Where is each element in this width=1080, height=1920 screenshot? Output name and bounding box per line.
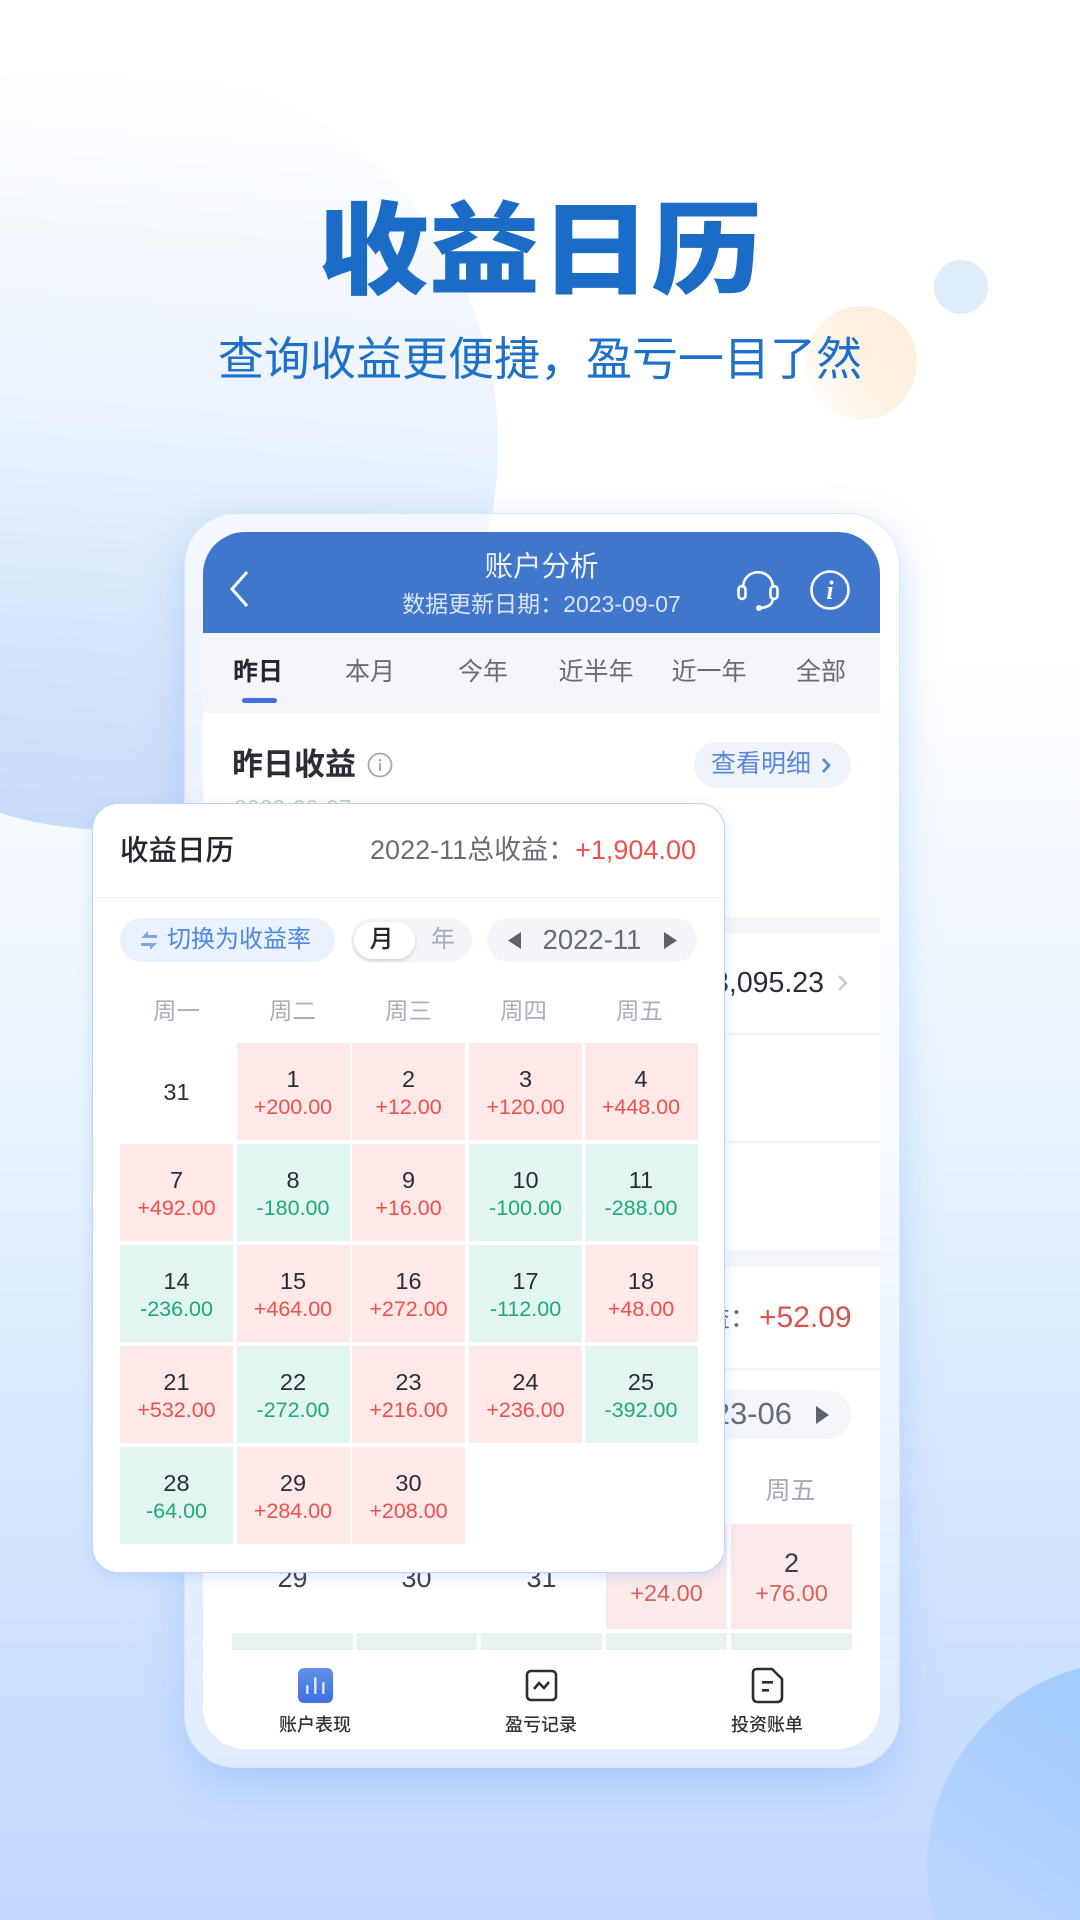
day 25: -392.00 [605, 1398, 677, 1422]
weekday: Wednesday: 周三 [385, 998, 432, 1024]
weekday: Thursday: 周四 [500, 998, 547, 1024]
day 14 [120, 1245, 233, 1342]
month selector [487, 918, 697, 962]
tab: all: 全部 [796, 658, 846, 686]
day 9: 9 [402, 1167, 415, 1193]
icon: next [664, 932, 677, 949]
title: 收益日历 [318, 195, 762, 308]
subtitle: 查询收益更便捷，盈亏一目了然 [218, 333, 862, 385]
app header bar [203, 532, 880, 633]
tab: half year: 近半年 [558, 658, 634, 686]
day 4 [584, 1043, 698, 1140]
toggle year: 年 [431, 926, 455, 953]
day 8 [236, 1144, 350, 1241]
header update date: 数据更新日期：2023-09-07 [402, 591, 681, 617]
month text: 2022-11 [543, 924, 641, 955]
day 23: +216.00 [369, 1398, 448, 1422]
calendar grid [120, 1043, 698, 1544]
day 2 [352, 1043, 465, 1140]
day 1 [236, 1043, 350, 1140]
background circle: large top-left [0, 191, 498, 830]
day 15: 15 [280, 1268, 306, 1294]
day 21: +532.00 [137, 1398, 216, 1422]
button label: 切换为收益率 [167, 926, 311, 953]
label: investment bill: 投资账单 [731, 1715, 803, 1735]
header title: 账户分析 [484, 551, 598, 583]
day 3 [469, 1043, 582, 1140]
panel: earnings calendar card [92, 803, 725, 1573]
period tabs [203, 633, 880, 713]
day 7: 7 [170, 1167, 183, 1193]
icon: small info [368, 752, 392, 778]
day 3: 3 [519, 1066, 532, 1092]
day 18: 18 [628, 1268, 654, 1294]
icon: swap arrows [141, 931, 157, 950]
tab: this month: 本月 [345, 658, 395, 686]
day 11: -288.00 [605, 1196, 677, 1220]
icon: info: i [826, 576, 834, 605]
row chevron [838, 975, 848, 991]
day 14: 14 [163, 1268, 190, 1294]
day 10: -100.00 [489, 1196, 562, 1220]
day 24: 24 [512, 1369, 539, 1395]
day 23 [352, 1346, 465, 1443]
monthly total value: +52.09 [759, 1301, 852, 1334]
day 9: +16.00 [375, 1196, 442, 1220]
day 29 [236, 1447, 350, 1544]
yesterday earnings heading: 昨日收益 [232, 747, 356, 782]
back calendar date 30: 30 [401, 1563, 432, 1593]
day 1: 1 [286, 1066, 300, 1092]
icon: back arrow [230, 571, 248, 607]
decorative circle: small blue [934, 260, 988, 314]
day 22: -272.00 [257, 1398, 329, 1422]
view details button [694, 742, 851, 788]
icon: next triangle [816, 1406, 829, 1424]
weekday label Friday: 周五 [765, 1477, 816, 1505]
day 30: +208.00 [369, 1499, 448, 1523]
day 15 [236, 1245, 350, 1342]
date selector behind card [500, 1390, 851, 1439]
tab: one year: 近一年 [671, 658, 746, 686]
weekday: Tuesday: 周二 [269, 998, 316, 1024]
icon: account performance [298, 1668, 333, 1703]
day 22 [236, 1346, 350, 1443]
decorative circle: bottom right [927, 1668, 1080, 1920]
day 23: 23 [395, 1369, 422, 1395]
back calendar cell 2: 2 [784, 1548, 799, 1578]
tab: yesterday active: 昨日 [233, 658, 283, 686]
label: profit record: 盈亏记录 [505, 1715, 577, 1735]
day 24: +236.00 [486, 1398, 565, 1422]
day 9 [352, 1144, 465, 1241]
panel: phone screen [203, 532, 880, 1749]
back calendar cell 1: +24.00 [630, 1580, 703, 1606]
card heading: 收益日历 [120, 835, 234, 867]
day 22: 22 [280, 1369, 306, 1395]
day 17 [469, 1245, 582, 1342]
day 25 [584, 1346, 698, 1443]
day 16: 16 [395, 1268, 422, 1294]
day 16 [352, 1245, 465, 1342]
date selector text: 2023-06 [678, 1396, 792, 1431]
day 28: -64.00 [146, 1499, 207, 1523]
section divider band [203, 917, 880, 933]
weekday: Friday: 周五 [616, 998, 663, 1024]
day 18 [584, 1245, 698, 1342]
switch to rate button [120, 918, 335, 962]
day 7: +492.00 [137, 1196, 216, 1220]
day 1: +200.00 [254, 1095, 332, 1119]
day 11: 11 [629, 1167, 653, 1193]
decorative circle: orange [805, 306, 917, 420]
day 16: +272.00 [369, 1297, 448, 1321]
day 2: +12.00 [375, 1095, 442, 1119]
back calendar date 29: 29 [277, 1563, 308, 1593]
phone frame [184, 513, 900, 1768]
day 21: 21 [163, 1369, 190, 1395]
day 10: 10 [512, 1167, 539, 1193]
active tab underline [242, 698, 277, 703]
back calendar cell 1 [606, 1524, 727, 1629]
view details button: 查看明细 [711, 750, 811, 778]
day 4: 4 [634, 1066, 648, 1092]
day 24 [469, 1346, 582, 1443]
icon: headset [737, 571, 779, 611]
back calendar next row strip [232, 1633, 852, 1650]
back calendar cell 2: +76.00 [755, 1580, 828, 1606]
monthly total label tail: 益： [704, 1303, 756, 1333]
card total earnings: 2022-11总收益：+1,904.00 [370, 835, 696, 865]
back calendar date 31: 31 [526, 1563, 557, 1593]
day 4: +448.00 [602, 1095, 680, 1119]
day 8: 8 [286, 1167, 300, 1193]
day 18: +48.00 [608, 1297, 674, 1321]
day 8: -180.00 [257, 1196, 329, 1220]
weekday: Monday: 周一 [153, 998, 200, 1024]
day 7 [120, 1144, 233, 1241]
toggle active month: 月 [370, 926, 394, 953]
day 11 [584, 1144, 698, 1241]
day 28: 28 [163, 1470, 190, 1496]
day 21 [120, 1346, 233, 1443]
day 3: +120.00 [486, 1095, 565, 1119]
day 31: 31 [163, 1079, 190, 1105]
month year toggle [351, 918, 472, 962]
icon: investment bill [752, 1668, 784, 1704]
icon: profit record [526, 1670, 558, 1702]
day 10 [469, 1144, 582, 1241]
total value: 133,095.23 [681, 967, 824, 999]
bottom navigation [203, 1650, 880, 1749]
clipped date text: 2023-09-07 [234, 795, 352, 821]
day 29: +284.00 [254, 1499, 332, 1523]
day 30 [352, 1447, 465, 1544]
day 28 [120, 1447, 233, 1544]
label: account performance: 账户表现 [279, 1715, 351, 1735]
day 14: -236.00 [140, 1297, 213, 1321]
day 25: 25 [628, 1369, 654, 1395]
tab: this year: 今年 [458, 658, 508, 686]
day 17: 17 [512, 1268, 539, 1294]
day 29: 29 [280, 1470, 306, 1496]
toggle active month [354, 922, 415, 959]
icon: info [810, 570, 850, 610]
day 15: +464.00 [254, 1297, 332, 1321]
day 2: 2 [402, 1066, 415, 1092]
day 17: -112.00 [490, 1297, 561, 1321]
back calendar cell 2 [731, 1524, 852, 1629]
day 30: 30 [395, 1470, 422, 1496]
back calendar cell 1: 1 [659, 1548, 674, 1578]
icon: previous [508, 932, 521, 949]
